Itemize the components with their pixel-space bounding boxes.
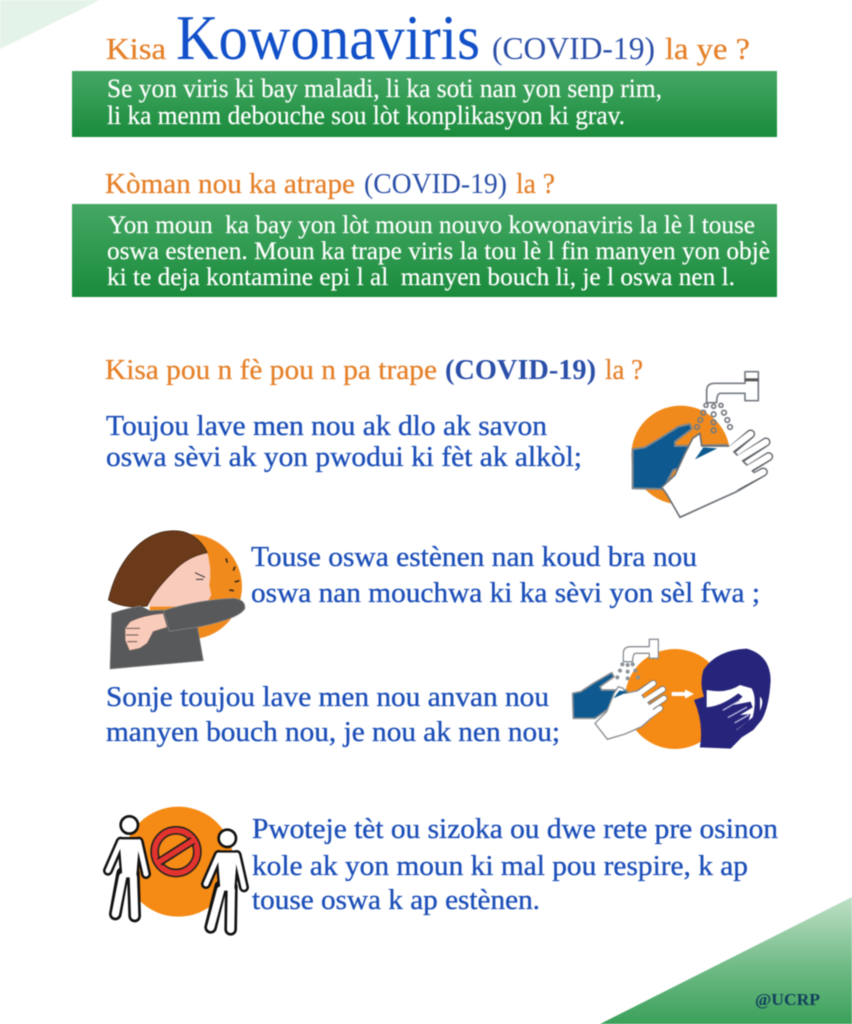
heading: prevention: Kisa pou n fè pou n pa trape	[105, 355, 437, 386]
icon: coughing into elbow	[108, 531, 245, 669]
heading: prevention	[105, 355, 643, 386]
panel: definition: Se yon viris ki bay maladi, li ka soti nan yon senp rim,	[107, 74, 662, 103]
text: distance: touse oswa k ap estènen.	[252, 884, 540, 916]
icon: hand washing	[631, 372, 769, 517]
text: wash hands: Toujou lave men nou ak dlo ak savon	[106, 410, 548, 442]
heading: how it spreads: Kòman nou ka atrape	[105, 169, 355, 200]
decorative corner: bottom right	[600, 897, 852, 1024]
text: do not touch face	[106, 681, 560, 748]
icon: person right	[206, 830, 244, 929]
text: cough	[251, 541, 760, 609]
text: do not touch face: Sonje toujou lave men nou anvan nou	[106, 681, 549, 713]
text: do not touch face: manyen bouch nou, je nou ak nen nou;	[106, 716, 560, 748]
decorative corner: top left	[0, 0, 100, 49]
title: Kisa	[106, 31, 166, 66]
text: wash hands: oswa sèvi ak yon pwodui ki fèt ak alkòl;	[106, 441, 582, 473]
heading: how it spreads: (COVID-19)	[364, 169, 507, 200]
heading: prevention: la ?	[605, 355, 643, 386]
heading: how it spreads: la ?	[516, 169, 555, 200]
credit: @UCRP	[755, 990, 820, 1009]
title: la ye ?	[665, 31, 750, 66]
panel: transmission: Yon moun ka bay yon lòt moun nouvo kowonaviris la lè l touse	[108, 212, 755, 239]
text: distance: Pwoteje tèt ou sizoka ou dwe rete pre osinon	[252, 813, 778, 845]
heading: how it spreads	[105, 169, 555, 200]
heading: prevention: (COVID-19)	[445, 355, 596, 386]
panel: transmission	[72, 204, 777, 297]
title: (COVID-19)	[492, 30, 655, 66]
icon: keep distance	[108, 807, 244, 929]
text: distance: kole ak yon moun ki mal pou respire, k ap	[252, 850, 748, 882]
panel: definition	[72, 71, 777, 137]
panel: transmission: ki te deja kontamine epi l al manyen bouch li, je l oswa nen l.	[107, 264, 735, 291]
text: cough: oswa nan mouchwa ki ka sèvi yon sèl fwa ;	[251, 577, 760, 609]
icon: wash hands before touching face	[573, 639, 771, 749]
title	[106, 2, 750, 73]
panel: definition: li ka menm debouche sou lòt konplikasyon ki grav.	[107, 101, 625, 130]
text: wash hands	[106, 410, 582, 473]
title: Kowonaviris	[176, 2, 480, 73]
icon: prohibition sign	[155, 830, 197, 873]
panel: transmission: oswa estenen. Moun ka trape viris la tou lè l fin manyen yon objè	[107, 238, 770, 265]
text: distance	[252, 813, 778, 916]
text: cough: Touse oswa estènen nan koud bra nou	[251, 541, 697, 573]
icon: person left	[108, 816, 146, 916]
